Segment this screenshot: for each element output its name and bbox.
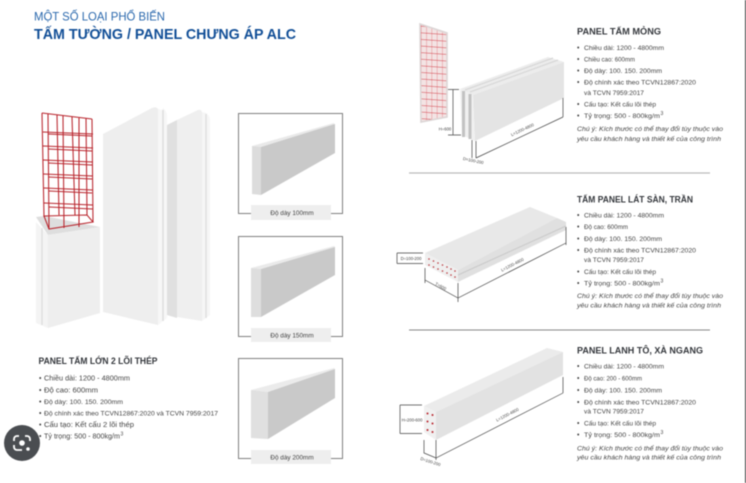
text block: lintel panel specs: • xyxy=(577,420,580,428)
text block: lintel panel specs: và TCVN 7959:2017 xyxy=(584,408,644,416)
dimension labels xyxy=(402,407,520,467)
text block: large panel specs: Tỷ trọng: 500 - 800kg/m xyxy=(44,434,120,440)
icon: second wall panel xyxy=(103,107,167,325)
text block: large panel specs: Chiều dài: 1200 - 4800mm xyxy=(44,374,130,382)
dimension labels xyxy=(439,122,535,165)
text block: large panel specs: Độ chính xác theo TCVN12867:2020 và TCVN 7959:2017 xyxy=(44,410,218,418)
text block: floor panel specs: Độ dày: 100. 150. 200mm xyxy=(584,236,662,243)
text block: floor panel specs: Tỷ trọng: 500 - 800kg/m xyxy=(584,280,660,288)
heading: large panel: PANEL TẤM LỚN 2 LÕI THÉP xyxy=(38,355,158,366)
text block: thin panel specs: 3 xyxy=(660,111,664,117)
icon: lintel beam xyxy=(424,348,563,440)
caption: 200mm: Độ dày 200mm xyxy=(270,454,314,462)
icon: lintel holes xyxy=(426,412,434,433)
text block: thin panel specs: Độ dày: 100. 150. 200mm xyxy=(584,68,662,75)
text block: lintel panel specs: • xyxy=(577,376,580,382)
text block: floor panel specs: Chiều dài: 1200 - 4800mm xyxy=(584,210,664,220)
note: lintel panel: Chú ý: Kích thước có thể thay đổi tùy thuộc vào xyxy=(577,444,723,452)
text block: floor panel specs: • xyxy=(577,280,580,288)
text block: thin panel specs: • xyxy=(577,113,580,120)
text block: thin panel specs: Cấu tạo: Kết cấu lõi thép xyxy=(584,100,656,108)
text block: floor panel specs: • xyxy=(577,248,580,254)
text block: floor panel specs: • xyxy=(577,224,580,231)
text block: floor panel specs: Độ chính xác theo TCVN12867:2020 xyxy=(584,248,696,254)
text block: large panel specs xyxy=(39,374,218,440)
icon: thin panel xyxy=(460,57,564,141)
text block: lintel panel specs: Độ dày: 100. 150. 200mm xyxy=(584,388,662,394)
text block: large panel specs: • xyxy=(39,434,42,440)
panel: thickness 200mm xyxy=(238,358,342,464)
text block: thin panel specs: • xyxy=(577,80,580,86)
text block: lintel panel specs xyxy=(577,362,696,439)
text block: thin panel specs: Chiều dài: 1200 - 4800mm xyxy=(584,43,664,52)
text block: lintel panel specs: 3 xyxy=(660,430,664,436)
dimension labels: L=1200-4800 xyxy=(510,122,535,137)
text block: floor panel specs: Cấu tạo: Kết cấu lõi thép xyxy=(584,267,656,276)
text block: thin panel specs: Chiều cao: 600mm xyxy=(584,54,635,64)
text block: large panel specs: • xyxy=(39,399,42,406)
text block: large panel specs: • xyxy=(39,388,42,394)
icon: camera search badge xyxy=(4,425,40,461)
text block: floor panel specs: • xyxy=(577,269,580,276)
note: thin panel xyxy=(576,125,723,143)
text block: thin panel specs: Độ chính xác theo TCVN12867:2020 xyxy=(584,80,696,86)
illustration: large wall panels with steel cage xyxy=(36,107,210,328)
text block: thin panel specs: • xyxy=(577,102,580,108)
text block: floor panel specs: • xyxy=(577,236,580,243)
dimension lines xyxy=(397,227,566,302)
icon: slab holes xyxy=(428,258,456,278)
icon: steel rebar cage xyxy=(42,113,93,229)
caption: 100mm: Độ dày 100mm xyxy=(270,210,314,217)
text block: lintel panel specs: Tỷ trọng: 500 - 800kg/m xyxy=(584,432,660,439)
note: thin panel: yêu cầu khách hàng và thiết kế của công trình xyxy=(576,134,721,143)
dimension labels: H=600 xyxy=(439,126,452,132)
text block: large panel specs: Cấu tạo: Kết cấu 2 lõi thép xyxy=(44,420,134,429)
text block: thin panel specs: • xyxy=(577,68,580,75)
text block: lintel panel specs: Cấu tạo: Kết cấu lõi thép xyxy=(584,418,656,428)
text block: thin panel specs: Tỷ trọng: 500 - 800kg/m xyxy=(584,113,660,120)
caption: 150mm: Độ dày 150mm xyxy=(270,332,314,340)
heading: floor panel: TẤM PANEL LÁT SÀN, TRẦN xyxy=(577,194,693,204)
text block: large panel specs: • xyxy=(39,422,42,429)
text block: floor panel specs: Độ cao: 600mm xyxy=(584,224,628,231)
dimension labels: L=1200-4800 xyxy=(500,257,525,273)
note: floor panel: Chú ý: Kích thước có thể thay đổi tùy thuộc vào xyxy=(577,292,723,300)
icon: floor slab xyxy=(425,207,566,282)
panel: thickness 150mm xyxy=(238,236,342,342)
text block: thin panel specs: • xyxy=(577,56,580,64)
note: floor panel xyxy=(576,292,723,310)
heading: thin panel: PANEL TẤM MỎNG xyxy=(577,26,661,36)
icon: 100mm slab xyxy=(252,123,335,195)
text block: lintel panel specs: • xyxy=(577,400,580,406)
icon: reinforcement mesh xyxy=(420,24,447,122)
text block: thin panel specs xyxy=(577,43,696,120)
text block: large panel specs: • xyxy=(39,410,42,418)
text block: floor panel specs: 3 xyxy=(660,278,664,284)
dimension lines xyxy=(400,377,563,460)
text block: lintel panel specs: • xyxy=(577,364,580,370)
note: thin panel: Chú ý: Kích thước có thể thay đổi tùy thuộc vào xyxy=(577,125,723,133)
text block: floor panel specs: • xyxy=(577,212,580,220)
text block: lintel panel specs: • xyxy=(577,432,580,439)
text block: large panel specs: 3 xyxy=(120,432,124,438)
text block: floor panel specs xyxy=(577,210,696,288)
diagram: lintel panel xyxy=(400,348,563,467)
icon: 200mm slab xyxy=(251,368,335,439)
dimension labels: D=100-200 xyxy=(401,256,422,261)
diagram: floor and ceiling panel xyxy=(397,207,566,302)
dimension labels: T=600 xyxy=(434,281,448,292)
text block: lintel panel specs: • xyxy=(577,388,580,394)
note: floor panel: yêu cầu khách hàng và thiết kế của công trình xyxy=(576,300,721,310)
title: MỘT SỐ LOẠI PHỔ BIẾN xyxy=(34,8,165,24)
icon: short panel base xyxy=(36,216,100,328)
text block: lintel panel specs: Độ chính xác theo TCVN12867:2020 xyxy=(584,400,696,406)
title: TẤM TƯỜNG / PANEL CHƯNG ÁP ALC xyxy=(34,25,296,43)
text block: thin panel specs: • xyxy=(577,45,580,52)
note: lintel panel xyxy=(576,444,723,462)
icon: third wall panel xyxy=(167,110,210,321)
diagram: thin panel with mesh xyxy=(420,24,564,165)
panel: thickness 100mm xyxy=(238,114,342,220)
note: lintel panel: yêu cầu khách hàng và thiết kế của công trình xyxy=(576,452,721,462)
dimension labels: H=200-600 xyxy=(402,418,423,422)
title xyxy=(34,8,296,43)
text block: floor panel specs: và TCVN 7959:2017 xyxy=(584,257,644,264)
icon: 150mm slab xyxy=(251,246,335,317)
dimension labels: D=100-200 xyxy=(463,156,485,165)
text block: large panel specs: • xyxy=(39,376,42,382)
dimension lines xyxy=(448,90,563,158)
dimension labels: D=100-200 xyxy=(420,456,442,467)
dimension labels xyxy=(401,256,525,292)
dimension labels: L=1200-4800 xyxy=(495,407,520,423)
text block: lintel panel specs: Chiều dài: 1200 - 4800mm xyxy=(584,362,664,370)
text block: lintel panel specs: Độ cao: 200 - 600mm xyxy=(584,376,642,382)
heading: lintel panel: PANEL LANH TÔ, XÀ NGANG xyxy=(577,344,703,356)
text block: large panel specs: Độ cao: 600mm xyxy=(44,388,98,394)
text block: thin panel specs: và TCVN 7959:2017 xyxy=(584,90,644,97)
text block: large panel specs: Độ dày: 100. 150. 200mm xyxy=(44,399,123,406)
